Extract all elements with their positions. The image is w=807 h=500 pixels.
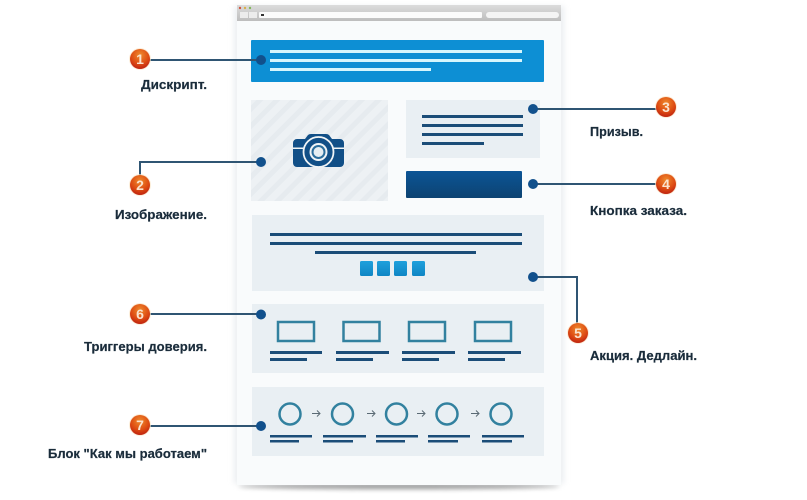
callout 3: Призыв.: [590, 125, 643, 139]
panel: image placeholder: [251, 100, 388, 201]
callout 3: [528, 96, 677, 139]
callout 2: 2: [136, 177, 144, 193]
icon: camera: [293, 134, 344, 167]
browser window: [234, 5, 564, 489]
panel: how we work: [252, 387, 544, 456]
callout 5: 5: [574, 325, 582, 341]
callout 4: [528, 173, 687, 218]
callout 2: Изображение.: [115, 208, 207, 222]
callout 1: [129, 48, 266, 92]
callout 3: 3: [662, 99, 670, 115]
callout 5: [528, 272, 697, 363]
callout 7: [48, 414, 266, 461]
page area: [237, 20, 561, 485]
callout 6: [84, 303, 266, 354]
window shadow: [239, 483, 559, 489]
callout 1: Дискрипт.: [141, 78, 207, 92]
callout 7: 7: [136, 417, 144, 433]
panel: promotion and deadline: [252, 215, 544, 291]
browser toolbar: [237, 5, 561, 21]
panel: trust triggers: [252, 304, 544, 373]
callout 6: Триггеры доверия.: [84, 340, 207, 354]
callout 4: Кнопка заказа.: [590, 204, 687, 218]
panel: description banner: [251, 40, 544, 82]
panel: call to action: [406, 100, 540, 158]
callout 4: 4: [662, 176, 670, 192]
order button: [406, 171, 522, 198]
callout 1: 1: [136, 51, 144, 67]
callout 7: Блок "Как мы работаем": [48, 447, 207, 461]
callout 2: [115, 157, 266, 222]
callout 5: Акция. Дедлайн.: [590, 349, 697, 363]
icon: arrows: [312, 410, 479, 416]
callout 6: 6: [136, 306, 144, 322]
